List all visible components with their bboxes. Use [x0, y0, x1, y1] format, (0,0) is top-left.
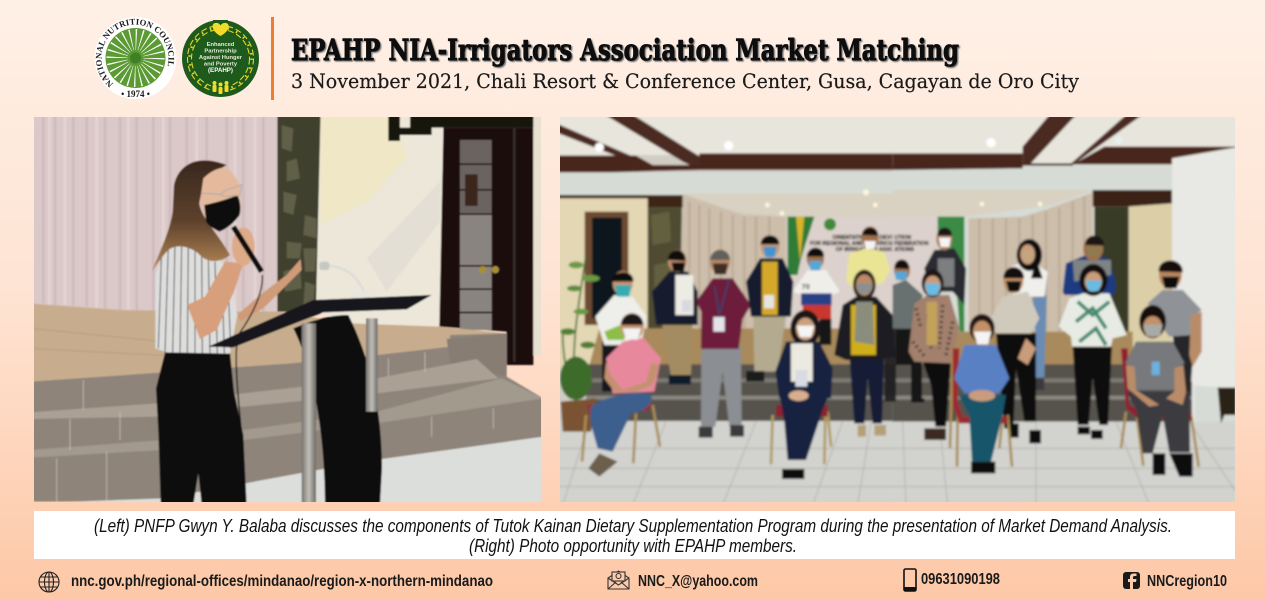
stone pillar — [277, 115, 321, 312]
icon: globe — [39, 572, 59, 592]
logo: National Nutrition Council: NATIONAL NUTRITION COUNCIL — [96, 18, 174, 88]
room right half: UTION — [894, 235, 911, 241]
person: woman in white top behind — [1011, 239, 1048, 390]
stage floor — [30, 303, 507, 382]
people, left group — [582, 226, 896, 479]
chair — [582, 405, 660, 463]
subtitle: date and venue: 3 November 2021, Chali Resort & Conference Center, Gusa, Cagayan de Oro City — [291, 70, 1079, 93]
stage backdrop banner: ORIENTATION ON DEVOL — [832, 235, 898, 241]
stage backdrop banner: OF IRRIGATORS ASSOC — [836, 247, 898, 253]
hair — [152, 160, 230, 272]
photo: group picture with EPAHP members — [556, 115, 1238, 507]
logo: EPAHP — [182, 20, 259, 97]
website address: nnc.gov.ph/regional-offices/mindanao/region-x-northern-mindanao — [71, 573, 493, 590]
person: seated in blue blouse — [950, 314, 1012, 473]
wall — [316, 115, 443, 328]
caption line two: (Right) Photo opportunity with EPAHP members. — [469, 535, 797, 556]
person: man in black and grey shirt — [924, 228, 966, 305]
orange divider — [271, 17, 274, 100]
steps — [586, 364, 898, 422]
stairs — [30, 333, 543, 502]
person: navy and grey vest man — [1063, 236, 1116, 295]
Facebook handle: NNCregion10 — [1147, 573, 1227, 590]
person: green and white polo — [595, 271, 647, 392]
speaker — [152, 160, 302, 505]
podium — [208, 262, 432, 505]
header — [94, 17, 1080, 100]
face — [199, 166, 241, 220]
stage backdrop banner: FOR REGIONAL AND PROVINCIAL — [810, 241, 898, 247]
logo: National Nutrition Council: • 1974 • — [121, 89, 150, 99]
person: standing in grey polo — [1148, 260, 1202, 408]
person: white, blue and red jersey — [793, 247, 840, 345]
photo: speaker at the podium — [30, 115, 543, 505]
stage backdrop banner — [788, 217, 898, 333]
far arm — [237, 259, 302, 322]
person: seated in navy jacket — [771, 310, 833, 479]
striped shirt — [155, 241, 237, 354]
door and frame — [388, 115, 543, 365]
near arm — [187, 262, 243, 339]
icon: Facebook — [1123, 572, 1140, 589]
potted plant — [560, 255, 600, 432]
logo: EPAHP: Partnership — [204, 48, 237, 54]
person: leopard print blazer — [909, 269, 959, 440]
person: white, blue and red jersey: 70 — [802, 282, 810, 291]
icon: envelope — [608, 571, 629, 589]
person: leather jacket with scarf — [834, 270, 896, 437]
person: floral blouse and black trousers — [1059, 264, 1127, 439]
room left half — [556, 115, 898, 506]
face mask — [204, 195, 240, 232]
floor — [30, 437, 543, 505]
logo: EPAHP: Enhanced — [207, 42, 235, 48]
logo: EPAHP: and Poverty — [204, 62, 238, 68]
person: black jacket with orange lanyard — [652, 250, 698, 384]
caption box — [34, 511, 1235, 559]
glasses — [202, 185, 242, 197]
people, right group — [893, 228, 1202, 477]
footer: contact details — [39, 569, 1227, 592]
phone number: 09631090198 — [921, 571, 1000, 588]
person: yellow shirt — [846, 226, 890, 288]
logo: EPAHP: (EPAHP) — [208, 67, 233, 74]
title: EPAHP NIA-Irrigators Association Market Matching — [291, 33, 959, 67]
room right half: ATIONS — [894, 247, 915, 253]
logo: EPAHP: Against Hunger — [199, 55, 243, 61]
person: maroon polo with grey jeans — [696, 249, 751, 438]
person: seated in grey polo — [1121, 305, 1199, 477]
person: seated in pink polo — [582, 313, 661, 477]
email address: NNC_X@yahoo.com — [638, 573, 758, 590]
curtain — [30, 115, 277, 312]
microphone — [233, 227, 262, 272]
room right half — [893, 115, 1238, 507]
person: striped shirt and black trousers — [990, 267, 1041, 443]
trousers — [156, 352, 247, 505]
white partition panel — [1172, 147, 1236, 425]
icon: mobile phone — [904, 569, 916, 591]
person: man in grey vest at far left — [893, 259, 924, 402]
person: navy jacket over yellow shirt — [746, 235, 793, 382]
room right half: FEDERATION — [894, 241, 929, 247]
